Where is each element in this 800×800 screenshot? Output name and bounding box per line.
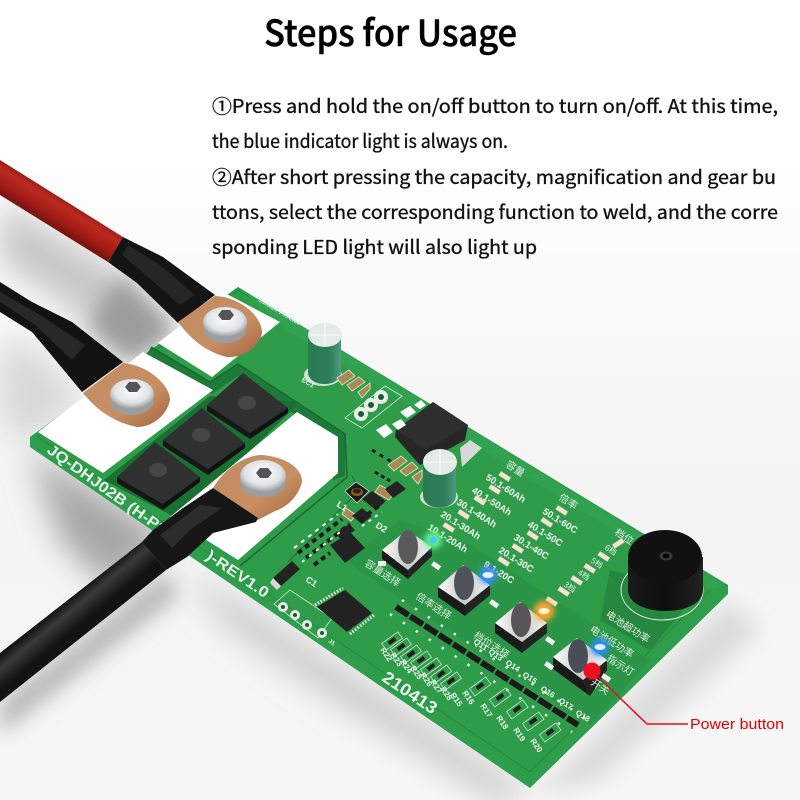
gear LEDs and labels: 3档 bbox=[561, 579, 578, 595]
power pad 2 bbox=[158, 292, 280, 377]
callout dot bbox=[584, 662, 600, 680]
resistor outlines R21-R28 bbox=[382, 632, 561, 742]
small resistor columns bbox=[294, 450, 392, 565]
board text labels left cluster bbox=[304, 499, 389, 648]
MOSFET 2 bbox=[163, 408, 245, 475]
regulator chip bbox=[376, 400, 482, 467]
cable: upper black bbox=[0, 282, 123, 392]
resistor labels: R20 bbox=[528, 737, 544, 755]
buzzer zone tone bbox=[600, 570, 700, 650]
resistor bodies bbox=[388, 637, 554, 736]
diode end cap bbox=[270, 578, 281, 590]
rate LEDs and labels: 40.1-50C bbox=[525, 519, 564, 549]
gear LEDs and labels: 5档 bbox=[588, 555, 605, 571]
resistor labels: R16 bbox=[460, 689, 476, 707]
Q labels: Q18 bbox=[574, 708, 592, 724]
LED: orange gear bbox=[534, 601, 554, 621]
LED: green capacity bbox=[424, 531, 442, 549]
battery power labels: 指示灯 bbox=[604, 650, 638, 679]
dark channel between pads bbox=[146, 347, 345, 480]
LED: blue rate bbox=[479, 566, 497, 584]
tactile button 4 bbox=[553, 638, 607, 696]
rate LEDs and labels: 20.1-30C bbox=[496, 545, 535, 575]
power pad 3 bbox=[170, 412, 338, 560]
gear LEDs and labels: 档位 bbox=[612, 524, 637, 547]
usage instructions: ②After short pressing the capacity, magnification and gear bu bbox=[212, 163, 776, 190]
power pad 1 bbox=[38, 352, 213, 473]
resistor labels: R18 bbox=[494, 714, 510, 732]
circuit board bbox=[30, 287, 728, 788]
upper rim strip bbox=[238, 287, 724, 590]
tactile button 1 bbox=[382, 530, 432, 579]
rate LEDs and labels: 30.1-40C bbox=[511, 532, 550, 562]
button group labels: 容量选择 bbox=[362, 555, 404, 589]
battery power labels: 电池低功率 bbox=[587, 621, 637, 661]
rate LEDs and labels: 倍率 bbox=[556, 489, 581, 512]
resistor labels: R28 bbox=[438, 685, 454, 703]
chips and diodes cluster bbox=[273, 481, 406, 586]
Q labels bbox=[472, 637, 592, 724]
callout leader line bbox=[592, 671, 688, 724]
buzzer bbox=[621, 530, 703, 620]
capacity LEDs and labels: 40.1-50Ah bbox=[469, 485, 513, 518]
bolt head 3 bbox=[240, 460, 286, 497]
usage instructions bbox=[212, 92, 778, 260]
SMD capacitors row 1 bbox=[337, 370, 370, 398]
rate LEDs and labels: 50.1-60C bbox=[540, 506, 579, 536]
board model marking: JQ-DHJ02B (H-PS bbox=[44, 441, 172, 539]
button group labels: 倍率选择 bbox=[413, 588, 455, 622]
board model marking bbox=[44, 441, 272, 602]
board text labels left cluster: D2 bbox=[374, 520, 389, 535]
callout: power button bbox=[584, 662, 784, 733]
Q labels: Q16 bbox=[539, 684, 557, 700]
SOP IC bbox=[315, 588, 374, 634]
header holes J1 bbox=[274, 590, 332, 638]
LED: blue power bbox=[591, 638, 609, 656]
resistor labels: R26 bbox=[418, 671, 434, 689]
cast shadows bbox=[0, 200, 760, 800]
Q labels: Q14 bbox=[504, 658, 522, 674]
Q labels: Q17 bbox=[557, 696, 575, 712]
gear LEDs and labels: 4档 bbox=[575, 567, 592, 583]
usage instructions: ttons, select the corresponding function to weld, and the corre bbox=[212, 198, 778, 225]
Q labels: Q13 bbox=[487, 647, 505, 663]
gear LEDs and labels: 6档 bbox=[602, 542, 619, 558]
board text labels left cluster: J1 bbox=[327, 639, 336, 648]
tactile button 3 bbox=[495, 602, 547, 653]
usage instructions: the blue indicator light is always on. bbox=[212, 127, 508, 154]
capacity LEDs and labels bbox=[425, 456, 528, 555]
board edge thickness bbox=[30, 287, 728, 788]
battery power labels: 开关 bbox=[588, 674, 613, 697]
Q labels: Q11 bbox=[472, 637, 490, 653]
tactile button 2 bbox=[438, 565, 490, 616]
board model marking: )-REV1.0 bbox=[203, 547, 272, 602]
capacitor EC2 bbox=[420, 449, 458, 508]
MOSFET 1 bbox=[117, 442, 200, 510]
resistor labels: R25 bbox=[408, 664, 424, 682]
connector holes bbox=[345, 386, 402, 428]
title: Steps for Usage bbox=[264, 5, 517, 57]
usage instructions: ①Press and hold the on/off button to turn on/off. At this time, bbox=[212, 92, 778, 119]
board text labels left cluster: C1 bbox=[304, 574, 319, 589]
lit LEDs bbox=[424, 531, 609, 656]
lower control zone tone bbox=[345, 520, 650, 725]
SMD parts near inductor bbox=[342, 456, 422, 521]
capacitor label EC1: EC1 bbox=[300, 377, 315, 390]
capacity LEDs and labels: 50.1-60Ah bbox=[483, 472, 527, 505]
rate LEDs and labels: 9.1-20C bbox=[481, 559, 516, 587]
capacity LEDs and labels: 20.1-30Ah bbox=[438, 509, 482, 542]
copper lug 3 bbox=[213, 455, 302, 520]
inductor L1 bbox=[345, 482, 369, 503]
button group labels: 档位选择 bbox=[471, 627, 513, 661]
resistor labels: R15 bbox=[448, 691, 464, 709]
resistor labels: R23 bbox=[388, 651, 404, 669]
battery power labels: 电池超功率 bbox=[603, 606, 653, 646]
capacity LEDs and labels: 10.1-20Ah bbox=[425, 522, 469, 555]
cable: lower black bbox=[0, 488, 258, 702]
bolt head 2 bbox=[110, 379, 154, 415]
row of driver transistors bbox=[396, 607, 578, 725]
board surface bbox=[30, 287, 724, 778]
resistor labels: R17 bbox=[478, 702, 494, 720]
small top marking: SS0982A_PSS-2104 bbox=[257, 298, 301, 327]
resistor labels: R22 bbox=[378, 646, 394, 664]
rate LEDs and labels bbox=[481, 489, 581, 587]
capacitor EC1 bbox=[304, 323, 342, 386]
gear LEDs and labels bbox=[545, 524, 637, 607]
resistor labels: R27 bbox=[428, 678, 444, 696]
resistor labels: R24 bbox=[398, 658, 414, 676]
resistor labels bbox=[378, 646, 544, 755]
capacity LEDs and labels: 30.1-40Ah bbox=[454, 497, 498, 530]
copper lug 2 bbox=[83, 363, 170, 427]
usage instructions: sponding LED light will also light up bbox=[212, 233, 537, 260]
button pin pads bbox=[378, 561, 611, 682]
serial number: 210413 bbox=[379, 668, 441, 718]
MOSFET 3 bbox=[207, 373, 288, 439]
MOSFET chips bbox=[117, 373, 288, 510]
battery power labels bbox=[587, 606, 653, 697]
driver row solder points bbox=[390, 600, 585, 732]
button group labels bbox=[362, 555, 513, 661]
board text labels left cluster: L1 bbox=[335, 499, 349, 513]
darker chip field bbox=[104, 396, 300, 520]
Q labels: Q15 bbox=[521, 670, 539, 686]
copper lug 1 bbox=[178, 296, 262, 357]
callout label: Power button bbox=[690, 717, 784, 733]
cable: red positive bbox=[0, 160, 215, 323]
bolt head 1 bbox=[203, 307, 247, 343]
resistor labels: R19 bbox=[511, 726, 527, 744]
capacity LEDs and labels: 容量 bbox=[503, 456, 528, 479]
